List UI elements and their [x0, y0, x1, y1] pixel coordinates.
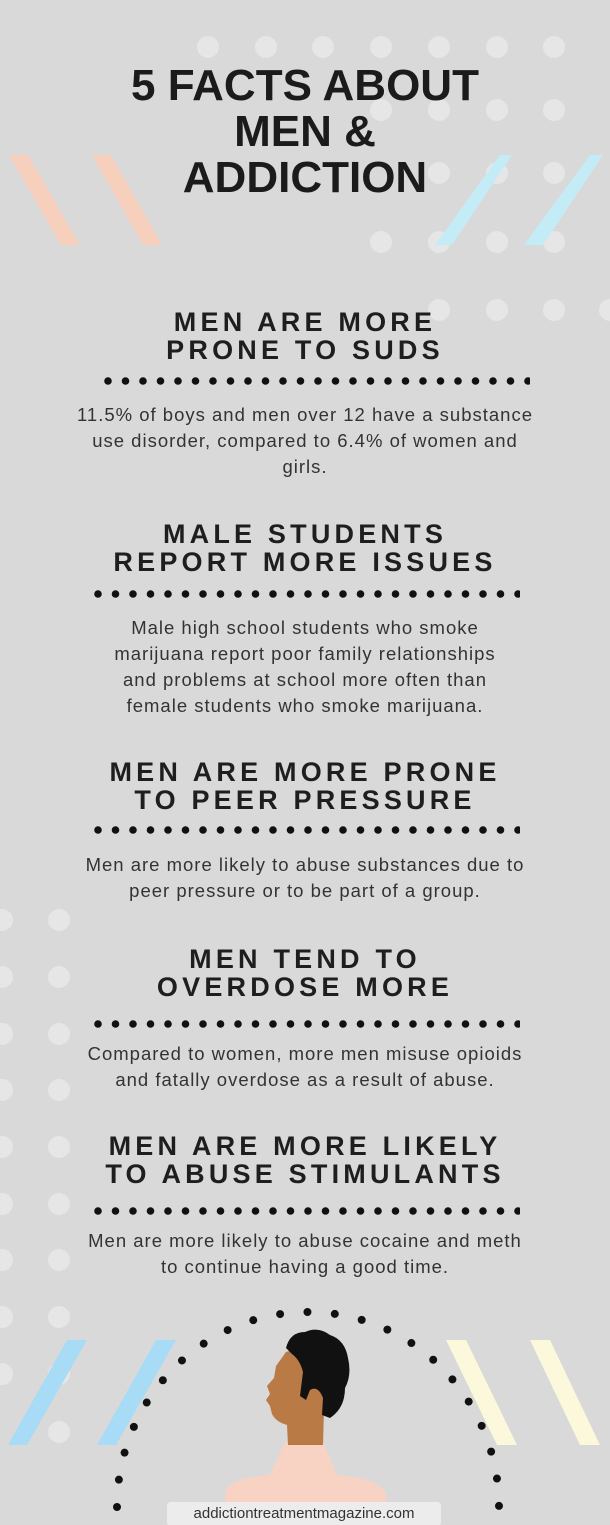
face — [266, 1346, 325, 1445]
section 1 text: 11.5% of boys and men over 12 have a substance — [77, 404, 533, 425]
footer url: addictiontreatmentmagazine.com — [194, 1505, 414, 1522]
dot divider 3 — [94, 826, 520, 834]
section 1 text — [77, 404, 533, 477]
section 2 heading: REPORT MORE ISSUES — [113, 547, 497, 577]
section 3 heading — [109, 757, 501, 815]
section 5 heading — [105, 1131, 505, 1189]
section 5 heading: MEN ARE MORE LIKELY — [109, 1131, 501, 1161]
title: 5 FACTS ABOUT — [131, 61, 479, 110]
section 4 heading: OVERDOSE MORE — [157, 972, 453, 1002]
title — [131, 61, 479, 202]
dot divider 2 — [94, 590, 520, 598]
shirt — [222, 1442, 390, 1525]
title: ADDICTION — [183, 153, 427, 202]
section 3 text: peer pressure or to be part of a group. — [129, 880, 481, 901]
section 2 text — [114, 617, 496, 716]
dot divider 4 — [94, 1020, 520, 1028]
section 1 heading — [166, 307, 444, 365]
section 1 text: girls. — [282, 456, 328, 477]
section 4 text — [88, 1043, 522, 1090]
section 1 heading: PRONE TO SUDS — [166, 335, 444, 365]
section 4 text: and fatally overdose as a result of abuse. — [115, 1069, 495, 1090]
section 2 text: marijuana report poor family relationships — [114, 643, 496, 664]
section 4 heading — [157, 944, 453, 1002]
section 5 text: to continue having a good time. — [161, 1256, 449, 1277]
section 3 text: Men are more likely to abuse substances due to — [86, 854, 524, 875]
dot divider 1 — [104, 377, 530, 385]
section 1 heading: MEN ARE MORE — [174, 307, 436, 337]
section 5 text: Men are more likely to abuse cocaine and meth — [88, 1230, 522, 1251]
section 2 text: and problems at school more often than — [123, 669, 487, 690]
dot divider 5 — [94, 1207, 520, 1215]
section 4 heading: MEN TEND TO — [189, 944, 421, 974]
section 2 text: female students who smoke marijuana. — [127, 695, 483, 716]
section 5 text — [88, 1230, 522, 1277]
section 3 heading: TO PEER PRESSURE — [134, 785, 476, 815]
section 2 text: Male high school students who smoke — [131, 617, 479, 638]
section 3 heading: MEN ARE MORE PRONE — [109, 757, 501, 787]
section 3 text — [86, 854, 524, 901]
section 4 text: Compared to women, more men misuse opioids — [88, 1043, 522, 1064]
section 1 text: use disorder, compared to 6.4% of women and — [92, 430, 518, 451]
dotted arc — [117, 1312, 499, 1507]
illustration: person with dotted arc — [113, 1308, 503, 1511]
footer url — [167, 1502, 441, 1525]
section 5 heading: TO ABUSE STIMULANTS — [105, 1159, 505, 1189]
title: MEN & — [234, 107, 376, 156]
section 2 heading — [113, 519, 497, 577]
hair — [286, 1330, 349, 1418]
section 2 heading: MALE STUDENTS — [163, 519, 447, 549]
